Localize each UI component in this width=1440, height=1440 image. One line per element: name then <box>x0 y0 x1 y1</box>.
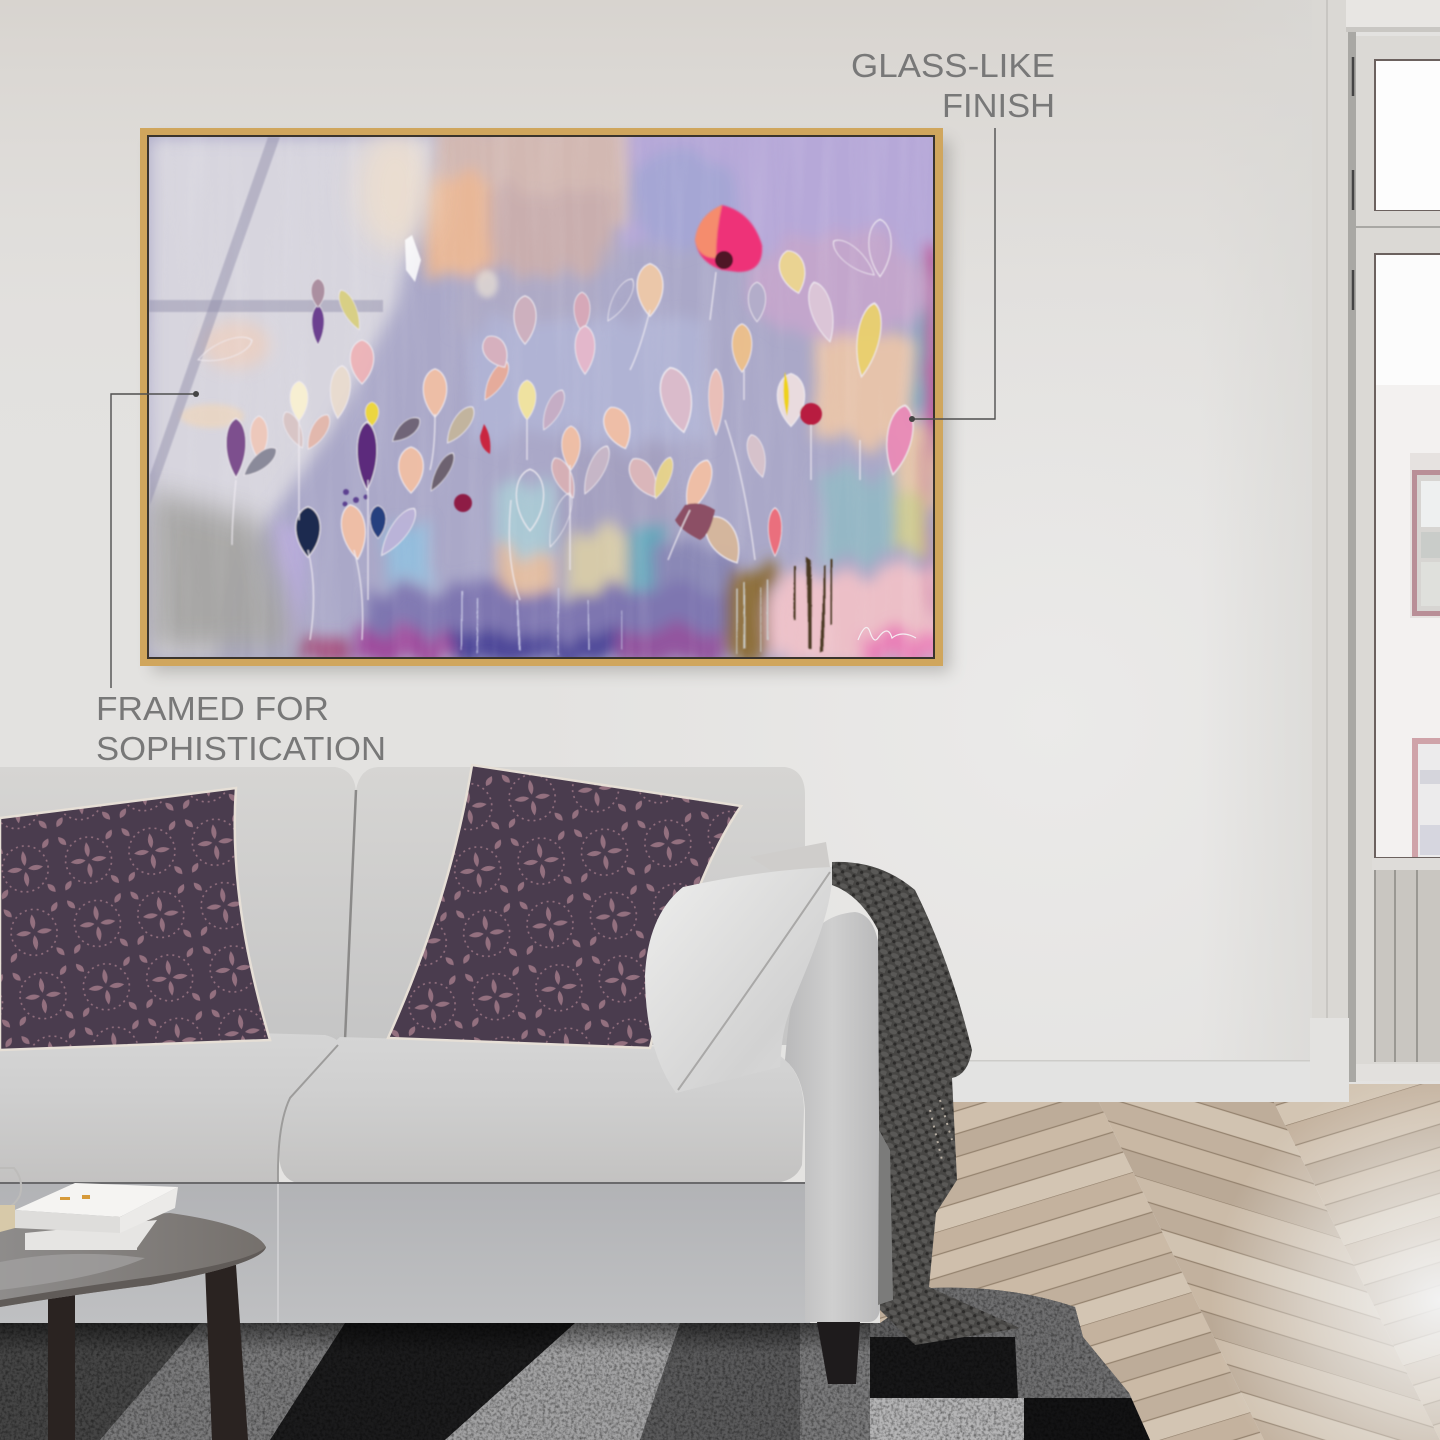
glass and tray <box>0 1168 21 1232</box>
window and door frame <box>1310 0 1440 1102</box>
flowers <box>195 205 917 640</box>
window reflection <box>149 137 826 657</box>
centre purple pillow <box>388 765 741 1048</box>
painted colour fields <box>272 120 950 665</box>
callout: glass-like finish: FINISH <box>942 87 1055 124</box>
stems <box>232 272 860 640</box>
baseboard <box>950 1060 1312 1102</box>
floor <box>880 1084 1440 1440</box>
callout: glass-like finish <box>851 47 1055 422</box>
painting canvas <box>149 120 950 665</box>
callout: framed for sophistication: SOPHISTICATION <box>96 730 386 767</box>
callout: glass-like finish: GLASS-LIKE <box>851 47 1055 84</box>
left purple pillow <box>0 788 270 1050</box>
white pillow <box>645 842 832 1093</box>
sofa <box>0 767 880 1384</box>
artist signature <box>858 628 916 640</box>
framed painting <box>140 120 950 672</box>
gold frame <box>140 128 943 666</box>
stacked books <box>15 1183 178 1250</box>
rug <box>0 1285 1160 1440</box>
callout: framed for sophistication <box>96 391 386 767</box>
callout: framed for sophistication: FRAMED FOR <box>96 690 329 727</box>
grey throw blanket <box>832 862 1020 1345</box>
wall <box>0 0 1440 1110</box>
drips and lower strokes <box>460 558 830 655</box>
coffee table <box>0 1213 266 1440</box>
